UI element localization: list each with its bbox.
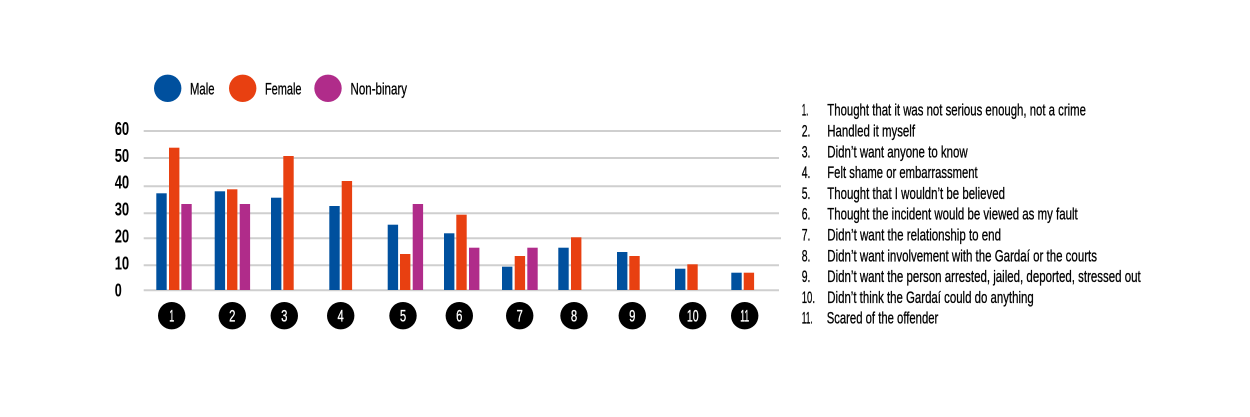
legend: female — [229, 75, 302, 102]
numbered list of reasons: Didn’t think the Gardaí could do anything — [827, 288, 1034, 307]
numbered list of reasons: 7. — [802, 226, 810, 244]
numbered category markers: 3 — [281, 308, 287, 326]
numbered category markers: 8 — [571, 308, 577, 326]
bars: group 3 — [271, 156, 294, 290]
numbered list of reasons: Felt shame or embarrassment — [827, 163, 978, 182]
bars: group 4 — [329, 181, 352, 290]
legend: female: Female — [265, 80, 302, 98]
numbered list of reasons: Thought that I wouldn’t be believed — [827, 184, 1005, 203]
numbered category markers: 5 — [400, 308, 406, 326]
bars: group 5 — [388, 204, 423, 290]
numbered list of reasons: 1. — [802, 101, 808, 120]
numbered category markers: 11 — [740, 308, 749, 326]
bar chart — [156, 148, 754, 290]
numbered list of reasons: Didn’t want anyone to know — [827, 142, 968, 161]
numbered list of reasons: 6. — [802, 205, 810, 224]
numbered list of reasons: 8. — [802, 246, 810, 265]
legend: male: Male — [190, 80, 214, 98]
bars: group 6 — [444, 215, 479, 290]
legend — [154, 75, 407, 102]
numbered list of reasons: Handled it myself — [827, 122, 915, 140]
bars: group 8 — [558, 237, 581, 290]
y axis labels — [115, 119, 129, 300]
legend: non-binary — [314, 75, 407, 102]
bars: group 1 — [156, 148, 192, 290]
numbered list of reasons: 4. — [802, 163, 810, 182]
numbered category markers: 9 — [629, 308, 635, 326]
bars: group 10 — [675, 264, 698, 290]
legend: male — [154, 75, 214, 102]
y axis labels: 20 — [115, 226, 129, 246]
numbered category markers: 10 — [687, 308, 699, 326]
y axis labels: 40 — [115, 172, 129, 192]
numbered category markers: 7 — [517, 308, 523, 326]
numbered list of reasons — [802, 101, 1141, 328]
numbered category markers: 4 — [338, 308, 344, 326]
bars: group 9 — [617, 252, 640, 290]
y axis labels: 0 — [115, 280, 122, 300]
numbered list of reasons: Didn’t want involvement with the Gardaí or the courts — [827, 246, 1097, 265]
numbered category markers: 2 — [229, 308, 235, 326]
numbered list of reasons: 5. — [802, 184, 810, 203]
numbered category markers: 6 — [456, 308, 462, 326]
y axis labels: 60 — [115, 119, 129, 139]
y axis labels: 10 — [115, 254, 129, 274]
bars: group 7 — [502, 248, 538, 290]
y axis labels: 50 — [115, 146, 129, 166]
numbered list of reasons: 11. — [802, 309, 813, 328]
numbered list of reasons: Thought the incident would be viewed as my fault — [827, 205, 1078, 224]
legend: non-binary: Non-binary — [350, 80, 407, 98]
numbered list of reasons: Scared of the offender — [827, 309, 939, 328]
numbered list of reasons: 10. — [802, 288, 815, 307]
numbered list of reasons: Thought that it was not serious enough, not a crime — [827, 101, 1086, 120]
y axis labels: 30 — [115, 200, 129, 220]
bars: group 2 — [215, 189, 250, 290]
numbered category markers: 1 — [169, 308, 174, 326]
numbered list of reasons: 2. — [802, 122, 810, 140]
numbered list of reasons: Didn’t want the relationship to end — [827, 226, 1001, 244]
numbered category markers — [158, 302, 758, 329]
numbered list of reasons: 9. — [802, 267, 810, 286]
bars: group 11 — [731, 273, 754, 290]
numbered list of reasons: 3. — [802, 142, 810, 161]
